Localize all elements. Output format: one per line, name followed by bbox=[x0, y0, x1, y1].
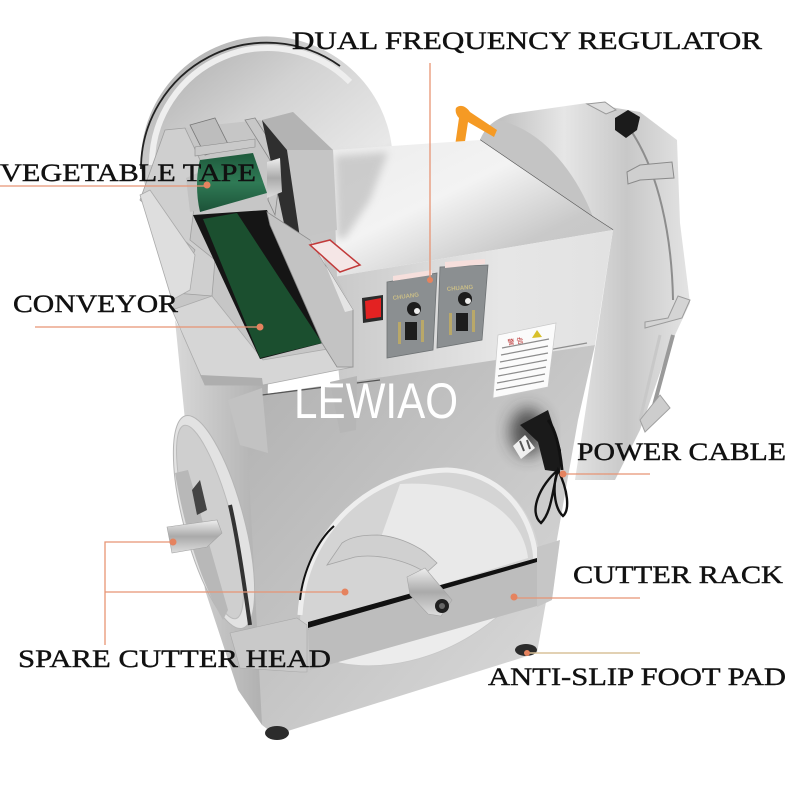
speed regulator panels bbox=[387, 259, 488, 358]
orange handle bbox=[455, 106, 497, 152]
label: cutter rack: CUTTER RACK bbox=[573, 562, 783, 589]
spare cutter handle bbox=[167, 520, 222, 553]
cutter rack bbox=[230, 540, 560, 672]
machine top face bbox=[333, 140, 613, 277]
black locking knob bbox=[615, 110, 640, 138]
right cutter drum bbox=[480, 102, 690, 480]
warning label bbox=[493, 323, 556, 398]
red power switch bbox=[362, 295, 383, 323]
left feed frame bbox=[140, 118, 282, 300]
spare cutter disc on side bbox=[157, 408, 271, 636]
drum hinge plate bbox=[587, 102, 616, 114]
label: conveyor bbox=[13, 291, 264, 330]
label: spare cutter head bbox=[18, 538, 348, 673]
power cable bbox=[510, 408, 567, 523]
label: anti-slip foot pad: ANTI-SLIP FOOT PAD bbox=[488, 664, 786, 691]
drum latch bbox=[627, 162, 674, 184]
label: cutter rack bbox=[510, 562, 783, 600]
watermark: LEWIAO bbox=[294, 373, 458, 429]
label: spare cutter head: SPARE CUTTER HEAD bbox=[18, 646, 331, 673]
label: vegetable tape: VEGETABLE TAPE bbox=[0, 160, 256, 187]
side adjustment rod bbox=[640, 296, 690, 432]
guard shadow on top face bbox=[335, 152, 388, 238]
handle reflection bbox=[456, 153, 464, 185]
vegetable tape roller bbox=[186, 153, 282, 212]
red warning sticker bbox=[310, 240, 360, 272]
feed section backing bbox=[145, 120, 353, 385]
machine illustration bbox=[140, 36, 690, 740]
top slicing guard disc bbox=[141, 36, 392, 240]
upper front panel bbox=[333, 230, 613, 386]
front cutter disc bbox=[300, 468, 540, 630]
conveyor belt bbox=[193, 210, 353, 367]
feed box bbox=[262, 112, 337, 238]
warning label: 警 告 bbox=[507, 336, 524, 347]
curved blade bbox=[327, 535, 437, 573]
lower front panel bbox=[245, 345, 595, 735]
label: anti-slip foot pad bbox=[488, 650, 786, 691]
label: dual frequency regulator: DUAL FREQUENCY REGULATOR bbox=[292, 28, 762, 55]
lower disc crescent bbox=[330, 610, 505, 666]
label: dual frequency regulator bbox=[292, 28, 762, 283]
regulator one: CHUANG bbox=[392, 292, 420, 302]
lower left side bbox=[175, 320, 268, 725]
feed table bbox=[172, 296, 357, 453]
blade handle bbox=[407, 568, 452, 616]
label: conveyor: CONVEYOR bbox=[13, 291, 178, 318]
label: power cable: POWER CABLE bbox=[577, 439, 786, 466]
label: power cable bbox=[560, 439, 786, 478]
regulator two: CHUANG bbox=[447, 285, 474, 293]
machine feet bbox=[265, 644, 537, 740]
